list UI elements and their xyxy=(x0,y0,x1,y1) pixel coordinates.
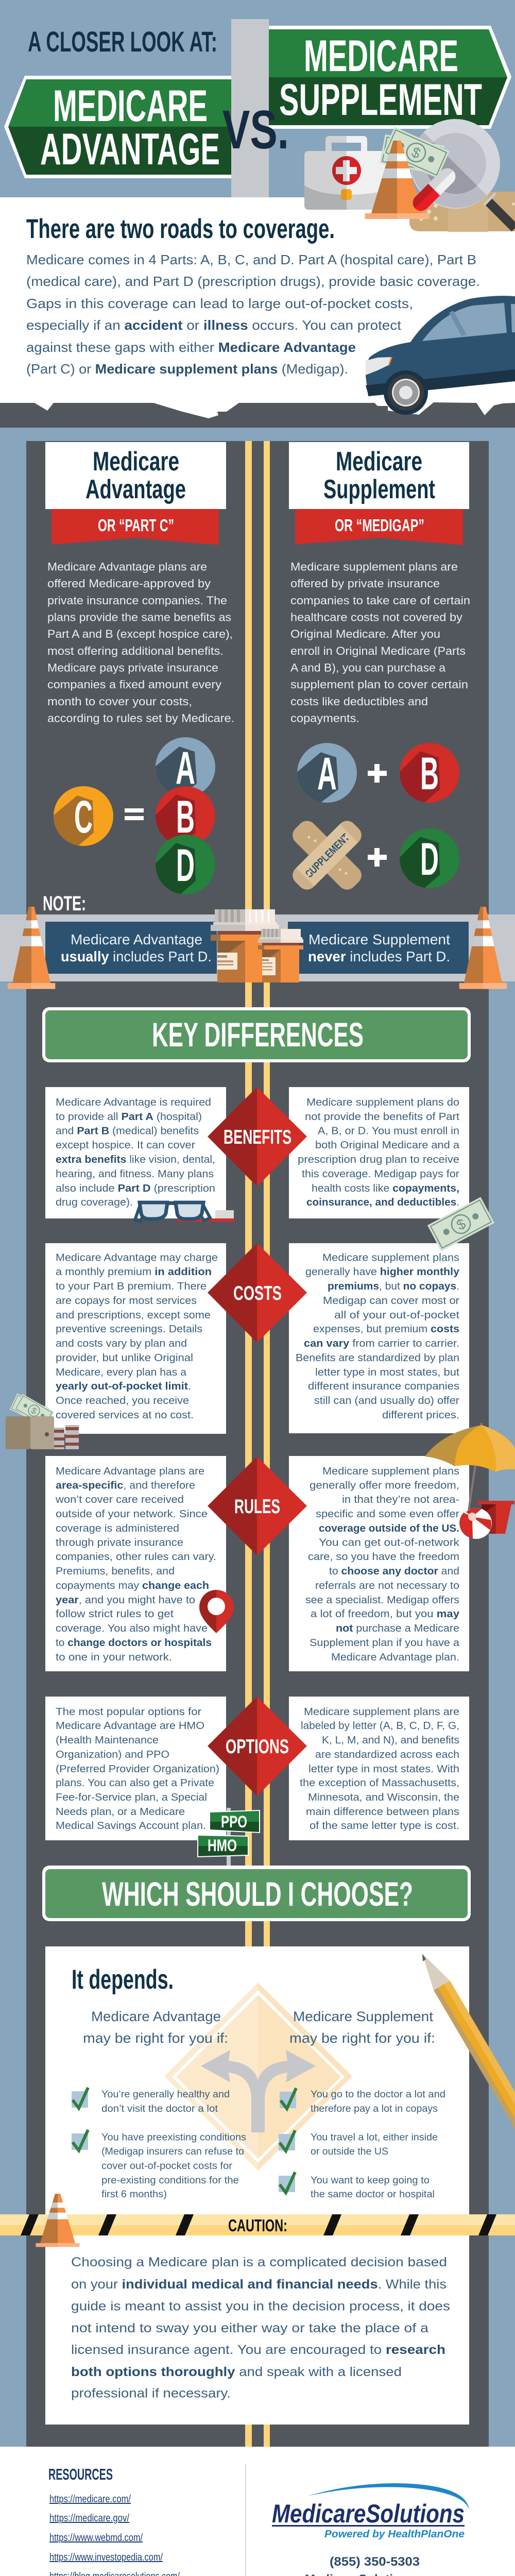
icon: cash xyxy=(428,1197,494,1251)
costs left: Medicare, every plan has a xyxy=(56,1366,187,1378)
rules left: year, and you might have to xyxy=(56,1594,195,1606)
sign: Medicare Advantage xyxy=(4,76,231,178)
circle A: A xyxy=(317,748,337,799)
ribbon: or Medigap: OR “MEDIGAP” xyxy=(335,516,424,535)
diamond: costs xyxy=(208,1243,307,1343)
caution text: not intend to sway you either way or take the place of a xyxy=(71,2321,428,2335)
heading: two roads: There are two roads to coverage. xyxy=(26,214,335,244)
benefits left: hearing, and fitness. Many plans xyxy=(56,1168,214,1180)
rules left: to change doctors or hospitals xyxy=(56,1637,212,1649)
circle A xyxy=(296,743,357,805)
diamond: benefits xyxy=(208,1087,307,1187)
caution text: guide is meant to assist you in the decision process, it does xyxy=(71,2299,450,2313)
cone on caution tape xyxy=(36,2194,79,2247)
panel: options xyxy=(45,1697,469,1840)
circle A: A xyxy=(176,742,195,793)
costs left xyxy=(45,1243,226,1434)
rules right: in that they’re not area- xyxy=(342,1494,459,1505)
icon: wallet and coins xyxy=(6,1394,79,1449)
heading box: Medicare xyxy=(93,447,179,477)
caution text: professional if necessary. xyxy=(71,2386,231,2401)
options right: the exception of Massachusetts, xyxy=(300,1777,459,1789)
costs left: a monthly premium in addition xyxy=(56,1266,212,1278)
options right: labeled by letter (A, B, C, D, F, G, xyxy=(301,1720,459,1732)
description: Medicare pays private insurance xyxy=(47,662,218,674)
benefits left: to provide all Part A (hospital) xyxy=(56,1111,202,1123)
column heading: Medicare Advantage xyxy=(83,2009,228,2046)
costs left: Once reached, you receive xyxy=(56,1395,189,1406)
description: private insurance companies. The xyxy=(47,594,227,607)
title: A closer look at: A CLOSER LOOK AT: xyxy=(28,25,217,58)
options left: Needs plan, or a Medicare xyxy=(56,1806,185,1818)
rules right: specific and some even offer xyxy=(316,1508,459,1520)
ribbon: or Part C: OR “PART C” xyxy=(98,516,174,535)
blue background xyxy=(0,428,515,2447)
panel: benefits xyxy=(45,1087,469,1218)
rules left: won’t cover care received xyxy=(55,1494,184,1505)
costs right: Medigap can cover most or xyxy=(323,1295,459,1307)
description: enroll in Original Medicare (Parts xyxy=(290,645,466,657)
resources links: https://medicare.com/ xyxy=(49,2494,131,2505)
benefits right: both Original Medicare and a xyxy=(315,1139,460,1151)
diamond: benefits: BENEFITS xyxy=(224,1126,291,1148)
circle C xyxy=(53,786,113,848)
costs right: different prices. xyxy=(382,1409,459,1421)
intro text: (Part C) or Medicare supplement plans (Medigap). xyxy=(26,361,348,377)
benefits left: also include Part D (prescription xyxy=(56,1182,215,1194)
costs right: premiums, but no copays. xyxy=(328,1280,459,1292)
resources links: https://medicare.gov/ xyxy=(49,2513,129,2524)
circle A xyxy=(156,737,215,791)
road cross band with cracked edge xyxy=(0,402,515,428)
costs left: yearly out-of-pocket limit . xyxy=(56,1380,191,1392)
circle B: B xyxy=(176,791,195,842)
caution text: on your individual medical and financial needs . While this xyxy=(71,2277,447,2292)
benefits right: this coverage. Medigap pays for xyxy=(302,1168,459,1180)
costs right: expenses, but premium costs xyxy=(313,1323,459,1335)
logo: Medicare Solutions: Powered by HealthPlanOne xyxy=(324,2529,465,2540)
note right: Medicare Supplement xyxy=(308,931,450,947)
circle D xyxy=(399,828,459,890)
ribbon: or Medigap xyxy=(295,509,463,545)
circle D: D xyxy=(176,839,195,891)
benefits right: Medicare supplement plans do xyxy=(306,1096,459,1108)
section sign: Key Differences xyxy=(42,1007,471,1062)
note right: never includes Part D. xyxy=(308,948,450,964)
rules right: Supplement plan if you have a xyxy=(310,1637,460,1649)
icon: beach umbrella, ball and bucket xyxy=(425,1423,515,1539)
illustration: medical kit xyxy=(304,136,390,210)
heading box: Supplement xyxy=(323,474,435,504)
description: A and B), you can purchase a xyxy=(290,662,446,674)
checklist: Medicare Supplement: therefore pay a lot in copays xyxy=(311,2104,438,2114)
benefits right: coinsurance, and deductibles. xyxy=(306,1196,459,1208)
rules right: generally offer more freedom, xyxy=(310,1480,459,1491)
description: companies a fixed amount every xyxy=(47,678,221,691)
ribbon: or Part C xyxy=(52,509,219,545)
icon: supplement bandage xyxy=(289,817,365,893)
benefits right: prescription drug plan to receive xyxy=(298,1154,459,1165)
diamond: options xyxy=(208,1697,307,1796)
heading box: Medicare xyxy=(336,447,422,477)
benefits right: not provide the benefits of Part xyxy=(305,1111,459,1123)
cone left xyxy=(8,907,55,989)
intro text: Gaps in this coverage can lead to large out-of-pocket costs, xyxy=(26,296,413,311)
illustration: traffic cone xyxy=(365,141,430,219)
caution text: licensed insurance agent. You are encouraged to research xyxy=(71,2343,445,2357)
icon: large pill bottle xyxy=(211,909,279,982)
section sign: Key Differences: KEY DIFFERENCES xyxy=(152,1015,364,1054)
costs left: Medicare Advantage may charge xyxy=(56,1252,218,1263)
icon: fork in the road sign xyxy=(164,1982,352,2171)
costs left: provider, but unlike Original xyxy=(56,1352,193,1364)
benefits left: drug coverage). xyxy=(56,1196,133,1208)
costs right: still can (and usually do) offer xyxy=(314,1395,459,1406)
note heading: NOTE: xyxy=(43,892,86,915)
circle B: B xyxy=(420,748,439,799)
description: costs like deductibles and xyxy=(290,695,428,708)
rules right: coverage outside of the US. xyxy=(319,1522,459,1534)
icon: glasses and toothbrush xyxy=(135,1202,234,1222)
illustration: money xyxy=(380,127,449,178)
column heading: Medicare Advantage: may be right for you if: xyxy=(83,2030,228,2046)
checklist: Medicare Advantage: don’t visit the doctor a lot xyxy=(101,2104,218,2114)
panel: Medicare Supplement overview xyxy=(289,442,470,893)
column heading: Medicare Supplement: Medicare Supplement xyxy=(293,2009,434,2024)
heading box xyxy=(289,442,469,509)
contact phone: (855) 350-5303 xyxy=(330,2555,420,2569)
signpost xyxy=(231,19,269,197)
icon: PPO and HMO street signs: PPO xyxy=(221,1812,247,1831)
description xyxy=(290,561,470,724)
description: offered by private insurance xyxy=(290,577,440,590)
checklist: Medicare Advantage: You’re generally healthy and xyxy=(101,2089,230,2100)
rules right: care, so you have the freedom xyxy=(308,1551,459,1563)
diamond: options: OPTIONS xyxy=(226,1736,289,1758)
benefits right: A, B, or D. You must enroll in xyxy=(318,1125,459,1137)
rules left: Premiums, benefits, and xyxy=(56,1565,175,1577)
note left: Medicare Advantage xyxy=(71,931,202,947)
caution text: Choosing a Medicare plan is a complicated decision based xyxy=(71,2255,447,2269)
options left xyxy=(45,1697,226,1840)
column heading: Medicare Advantage: Medicare Advantage xyxy=(91,2009,221,2024)
intro text: especially if an accident or illness occurs. You can protect xyxy=(26,317,402,333)
rules right: referrals are not necessary to xyxy=(315,1580,459,1591)
plus sign xyxy=(368,764,387,783)
icon: PPO and HMO street signs: HMO xyxy=(208,1836,237,1855)
icon: pencil xyxy=(422,1954,515,2129)
icon: PPO and HMO street signs xyxy=(197,1808,260,1866)
description: offered Medicare-approved by xyxy=(47,577,211,590)
benefits left: except hospice. It can cover xyxy=(56,1139,195,1151)
checklist: Medicare Advantage: pre-existing conditions for the xyxy=(101,2175,239,2186)
benefits right xyxy=(289,1087,469,1218)
costs right xyxy=(289,1243,469,1433)
options left: Fee-for-Service plan, a Special xyxy=(56,1791,207,1803)
checklist: Medicare Supplement: or outside the US xyxy=(311,2146,388,2157)
intro text: Medicare comes in 4 Parts: A, B, C, and D. Part A (hospital care), Part B xyxy=(26,252,476,267)
description xyxy=(47,561,234,724)
intro text: against these gaps with either Medicare Advantage xyxy=(26,340,356,355)
checklist: Medicare Supplement: You want to keep going to xyxy=(311,2175,430,2186)
column heading: Medicare Supplement xyxy=(289,2009,435,2046)
benefits left: Medicare Advantage is required xyxy=(56,1096,211,1108)
resources heading: RESOURCES xyxy=(48,2465,113,2483)
column heading: Medicare Supplement: may be right for you if: xyxy=(289,2030,435,2046)
rules left: area-specific , and therefore xyxy=(56,1480,195,1491)
options left: Medical Savings Account plan. xyxy=(56,1820,206,1832)
rules left: coverage. You also might have xyxy=(56,1622,208,1634)
description: most offering additional benefits. xyxy=(47,645,224,657)
description: plans provide the same benefits as xyxy=(47,611,231,623)
intro text xyxy=(26,252,480,377)
checklist: Medicare Supplement: You travel a lot, either inside xyxy=(311,2132,438,2143)
caution tape xyxy=(0,2214,515,2235)
caution text xyxy=(71,2255,450,2401)
rules right: see a specialist. Medigap offers xyxy=(305,1594,459,1606)
description: healthcare costs not covered by xyxy=(290,611,462,623)
circle D xyxy=(154,835,215,896)
icon: supplement bandage: SUPPLEMENT xyxy=(303,832,352,880)
rules right: Medicare supplement plans xyxy=(322,1465,459,1477)
cone right xyxy=(459,907,507,989)
options left: (Health Maintenance xyxy=(56,1734,159,1746)
rules left: Medicare Advantage plans are xyxy=(56,1465,204,1477)
checklist: Medicare Advantage: You have preexisting conditions xyxy=(101,2132,246,2143)
rules left: outside of your network. Since xyxy=(56,1508,208,1520)
description: Original Medicare. After you xyxy=(290,628,440,640)
checklist: Medicare Advantage: (Medigap insurers can refuse to xyxy=(101,2146,244,2157)
benefits left xyxy=(45,1087,226,1218)
note right xyxy=(288,922,469,974)
benefits left: and Part B (medical) benefits xyxy=(56,1125,199,1137)
costs left: preventive screenings. Details xyxy=(56,1323,202,1335)
rules left: follow strict rules to get xyxy=(56,1608,174,1620)
intro text: (medical care), and Part D (prescription drugs), provide basic coverage. xyxy=(26,274,480,289)
sign: Medicare Advantage: ADVANTAGE xyxy=(40,125,220,174)
rules left: copayments may change each xyxy=(56,1580,209,1591)
options right: Minnesota, and Wisconsin, the xyxy=(308,1791,459,1803)
rules left: companies, other rules can vary. xyxy=(56,1551,216,1563)
heading box: Advantage xyxy=(85,474,186,504)
section sign: Which should I choose xyxy=(42,1866,471,1921)
resources links: https://www.webmd.com/ xyxy=(49,2532,143,2544)
illustration: bandage xyxy=(409,192,515,232)
panel: rules xyxy=(45,1456,469,1671)
resources links: https://www.investopedia.com/ xyxy=(49,2552,163,2563)
sign: Medicare Advantage: MEDICARE xyxy=(53,81,208,131)
options left: Organization) and PPO xyxy=(56,1749,169,1760)
rules right: a lot of freedom, but you may xyxy=(311,1608,460,1620)
header background xyxy=(0,0,515,197)
panel: it depends xyxy=(45,1946,469,2425)
description: according to rules set by Medicare. xyxy=(47,712,234,724)
circle B xyxy=(399,743,459,805)
rules right: to choose any doctor and xyxy=(329,1565,459,1577)
description: companies to take care of certain xyxy=(290,594,470,607)
options left: Medicare Advantage are HMO xyxy=(56,1720,204,1732)
rules right: You can get out-of-network xyxy=(319,1536,460,1549)
costs right: different insurance companies xyxy=(308,1380,459,1392)
checklist: Medicare Supplement xyxy=(279,2088,445,2200)
costs right: can vary from carrier to carrier. xyxy=(304,1337,459,1349)
checklist: Medicare Advantage xyxy=(72,2088,246,2200)
panel: costs xyxy=(45,1243,469,1434)
costs left: and prescriptions, except some xyxy=(56,1309,211,1321)
costs right: Medicare supplement plans xyxy=(322,1252,459,1263)
checklist: Medicare Supplement: You go to the doctor a lot and xyxy=(311,2089,445,2100)
diamond: rules xyxy=(208,1456,307,1555)
resources links xyxy=(49,2494,192,2576)
options left: (Preferred Provider Organization) xyxy=(56,1763,219,1775)
panel: note barrier xyxy=(0,914,515,981)
rules left xyxy=(45,1456,226,1671)
rules left: to one in your network. xyxy=(56,1651,172,1663)
circle B xyxy=(156,786,215,840)
heading box xyxy=(45,442,226,509)
options left: The most popular options for xyxy=(56,1706,201,1718)
costs left: covered services at no cost. xyxy=(56,1409,194,1421)
costs right: Benefits are standardized by plan xyxy=(296,1352,459,1364)
rules right xyxy=(289,1456,469,1671)
circle C: C xyxy=(74,791,93,842)
costs right: all of your out-of-pocket xyxy=(334,1309,459,1321)
costs left: to your Part B premium. There xyxy=(56,1280,207,1292)
note left xyxy=(45,922,217,974)
options right: letter type in most states. With xyxy=(308,1763,459,1775)
vertical road xyxy=(26,441,489,2447)
VS.: VS. xyxy=(222,99,289,160)
caution tape: CAUTION: xyxy=(228,2216,287,2235)
checklist: Medicare Supplement: the same doctor or hospital xyxy=(311,2189,435,2200)
sign: Medicare Supplement xyxy=(269,26,511,129)
panel: footer xyxy=(0,2447,515,2576)
costs left: are copays for most services xyxy=(56,1295,197,1307)
illustration: car xyxy=(366,296,515,415)
panel: Medicare Advantage overview xyxy=(45,442,234,896)
description: supplement plan to cover certain xyxy=(290,678,468,691)
equals sign xyxy=(125,808,144,820)
divider xyxy=(245,2464,246,2576)
plus sign xyxy=(368,848,387,867)
costs left: and costs vary by plan and xyxy=(56,1337,187,1349)
options right: main difference between plans xyxy=(306,1806,459,1818)
rules right: Medicare Advantage plan. xyxy=(331,1651,459,1663)
diamond: rules: RULES xyxy=(234,1496,280,1518)
rules right: not purchase a Medicare xyxy=(336,1622,459,1634)
description: Medicare Advantage plans are xyxy=(47,561,207,573)
heading: it depends: It depends. xyxy=(72,1964,174,1995)
description: month to cover your costs, xyxy=(47,695,192,708)
options right: are standardized across each xyxy=(315,1749,459,1760)
illustration: magnifying glass xyxy=(410,119,515,228)
logo: Medicare Solutions xyxy=(272,2483,469,2540)
icon: small pill bottle xyxy=(258,929,303,982)
checklist: Medicare Advantage: cover out-of-pocket costs for xyxy=(101,2161,233,2172)
rules left: through private insurance xyxy=(56,1536,183,1549)
costs right: generally have higher monthly xyxy=(305,1266,460,1278)
logo: Medicare Solutions: MedicareSolutions xyxy=(272,2499,465,2528)
options right: K, L, M, and N), and benefits xyxy=(322,1734,459,1746)
circle D: D xyxy=(420,833,439,885)
options right: Medicare supplement plans are xyxy=(304,1706,459,1718)
options right xyxy=(289,1697,469,1840)
rules left: coverage is administered xyxy=(56,1522,179,1534)
diamond: costs: COSTS xyxy=(233,1282,282,1304)
options left: plans. You can also get a Private xyxy=(56,1777,214,1789)
description: Medicare supplement plans are xyxy=(290,561,458,573)
costs right: letter type in most states, but xyxy=(315,1366,459,1378)
caution text: both options thoroughly and speak with a licensed xyxy=(71,2365,402,2379)
icon: map pin xyxy=(199,1590,234,1633)
checklist: Medicare Advantage: first 6 months) xyxy=(101,2189,167,2200)
description: copayments. xyxy=(290,712,359,724)
options right: of the same letter type is cost. xyxy=(310,1820,459,1832)
benefits left: extra benefits like vision, dental, xyxy=(56,1154,215,1165)
note left: usually includes Part D. xyxy=(61,948,212,964)
illustration: pill xyxy=(409,165,459,214)
description: Part A and B (except hospice care), xyxy=(47,628,233,640)
benefits right: health costs like copayments, xyxy=(312,1182,459,1194)
